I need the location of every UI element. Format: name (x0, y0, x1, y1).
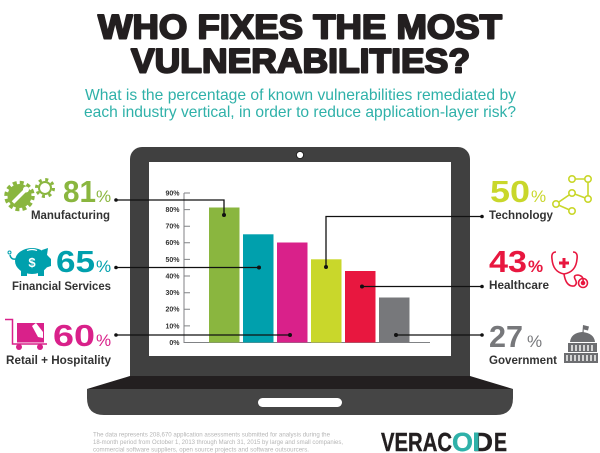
footnote: The data represents 208,670 application assessments submitted for analysis during the (93, 432, 331, 438)
axis labels: 20% (165, 307, 180, 314)
title: WHO FIXES THE MOST (98, 8, 502, 46)
axis labels: 40% (165, 274, 180, 280)
stat: technology: % (531, 187, 546, 206)
stat: government: % (527, 332, 542, 351)
stat: financial services (12, 244, 111, 293)
axis labels: 0% (169, 340, 180, 347)
stat: retail + hospitality: % (96, 331, 111, 350)
subtitle (84, 87, 516, 121)
footnote: 18-month period from October 1, 2013 through March 31, 2015 by large and small companies, (93, 440, 343, 446)
subtitle: What is the percentage of known vulnerabilities remediated by (85, 87, 516, 104)
stat: retail + hospitality: 60 (53, 318, 95, 353)
stat: healthcare: Healthcare (489, 280, 549, 292)
icon: piggy bank (8, 248, 51, 276)
icon: network (553, 176, 591, 214)
stat: healthcare: % (528, 257, 543, 276)
bars (209, 208, 410, 342)
icon: piggy bank: $ (28, 255, 36, 270)
stat: healthcare (489, 244, 549, 292)
axis labels: 60% (165, 240, 180, 247)
webcam (296, 151, 304, 159)
subtitle: each industry vertical, in order to reduce application-layer risk? (84, 104, 516, 121)
stat: technology: Technology (489, 210, 554, 222)
footnote (93, 432, 343, 453)
title: VULNERABILITIES? (131, 42, 470, 80)
laptop (87, 147, 513, 415)
axis labels (165, 190, 180, 347)
title (98, 8, 502, 80)
laptop hinge (87, 376, 513, 389)
trackpad notch (258, 398, 342, 407)
stat: financial services: Financial Services (12, 281, 111, 293)
stat: government: 27 (489, 319, 523, 354)
stat: manufacturing (31, 174, 111, 222)
stat: healthcare: 43 (489, 244, 527, 279)
stat: government (489, 319, 557, 367)
stat: retail + hospitality: Retail + Hospitality (6, 355, 112, 367)
axis labels: 50% (165, 257, 180, 264)
axis labels: 10% (165, 323, 180, 330)
stat: manufacturing: Manufacturing (31, 210, 110, 222)
bar chart (165, 190, 430, 347)
leader lines (116, 200, 482, 335)
stat: financial services: 65 (56, 244, 95, 279)
laptop screen (149, 162, 451, 356)
stat: government: Government (489, 355, 557, 367)
stat: technology (489, 174, 554, 222)
laptop lid (130, 147, 470, 376)
stat: manufacturing: 81 (63, 174, 96, 209)
axis labels: 90% (165, 190, 180, 198)
stat: manufacturing: % (96, 187, 111, 206)
leader dots (114, 198, 484, 337)
stat: financial services: % (96, 257, 111, 276)
icon: gears (6, 180, 54, 210)
stat: retail + hospitality (6, 318, 112, 367)
laptop base (87, 389, 513, 415)
icon: capitol building (564, 325, 598, 363)
stat: technology: 50 (490, 174, 530, 209)
icon: stethoscope (552, 252, 588, 288)
axis labels: 80% (165, 207, 180, 214)
axis labels: 30% (165, 290, 180, 297)
axes (184, 193, 430, 342)
axis labels: 70% (165, 224, 180, 230)
icon: shopping cart (5, 320, 47, 350)
